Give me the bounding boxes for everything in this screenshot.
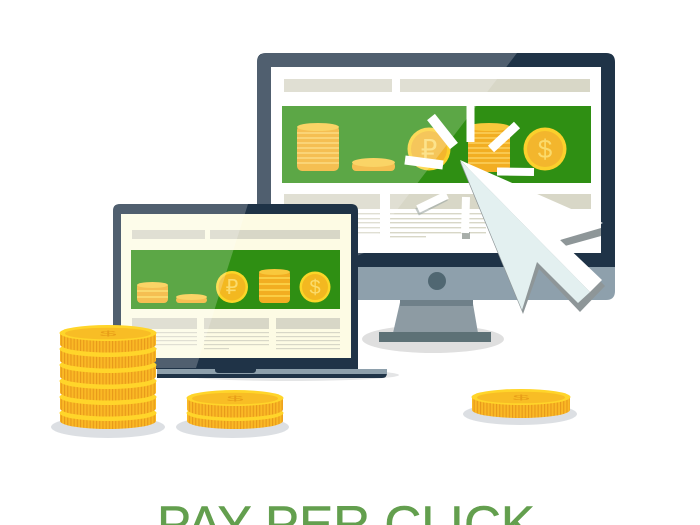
laptop screen: [121, 214, 351, 358]
top coin face: $: [226, 395, 244, 403]
monitor body: [257, 53, 615, 300]
stack shadow: [51, 416, 165, 438]
coin face: $: [512, 394, 530, 402]
laptop ruble coin: ₽: [226, 277, 239, 299]
laptop base: [157, 369, 387, 378]
cursor light face: [460, 160, 590, 310]
laptop glare: [113, 204, 248, 368]
dollar coin: [524, 128, 566, 170]
click rays: [405, 106, 534, 239]
cursor white face: [460, 160, 603, 292]
laptop lower columns: [132, 318, 340, 349]
monitor shadow: [362, 325, 504, 353]
ruble coin: [408, 128, 450, 170]
lower columns: [284, 194, 591, 237]
coin stack: six coins: [51, 325, 165, 438]
coin stack: [297, 123, 339, 171]
cursor shadow: [460, 162, 605, 314]
laptop coin stack left: [137, 282, 168, 303]
single coin: [463, 389, 577, 425]
green banner: [282, 106, 591, 183]
laptop header bars: [132, 230, 340, 239]
monitor: [257, 53, 615, 353]
laptop green banner: [131, 250, 340, 309]
laptop dollar coin: $: [309, 277, 321, 299]
laptop ruble coin: [216, 271, 248, 303]
laptop body: [113, 204, 358, 369]
coin stack: two coins: [176, 390, 289, 438]
coin shadow: [463, 403, 577, 425]
monitor glare: [257, 53, 517, 267]
monitor stand: [379, 298, 491, 342]
single coin: [352, 158, 395, 171]
coin stack right: [468, 123, 510, 172]
cursor arrow: [460, 160, 605, 314]
ruble coin: ₽: [421, 134, 437, 164]
dollar coin: $: [538, 134, 553, 164]
laptop dollar coin: [300, 272, 330, 302]
header bars: [284, 79, 590, 92]
laptop: [113, 204, 399, 381]
monitor screen: [271, 67, 601, 253]
stack shadow: [176, 416, 289, 438]
laptop single coin: [176, 294, 207, 303]
laptop shadow: [181, 369, 399, 381]
top coin face: $: [99, 330, 117, 338]
laptop coin stack right: [259, 269, 290, 303]
